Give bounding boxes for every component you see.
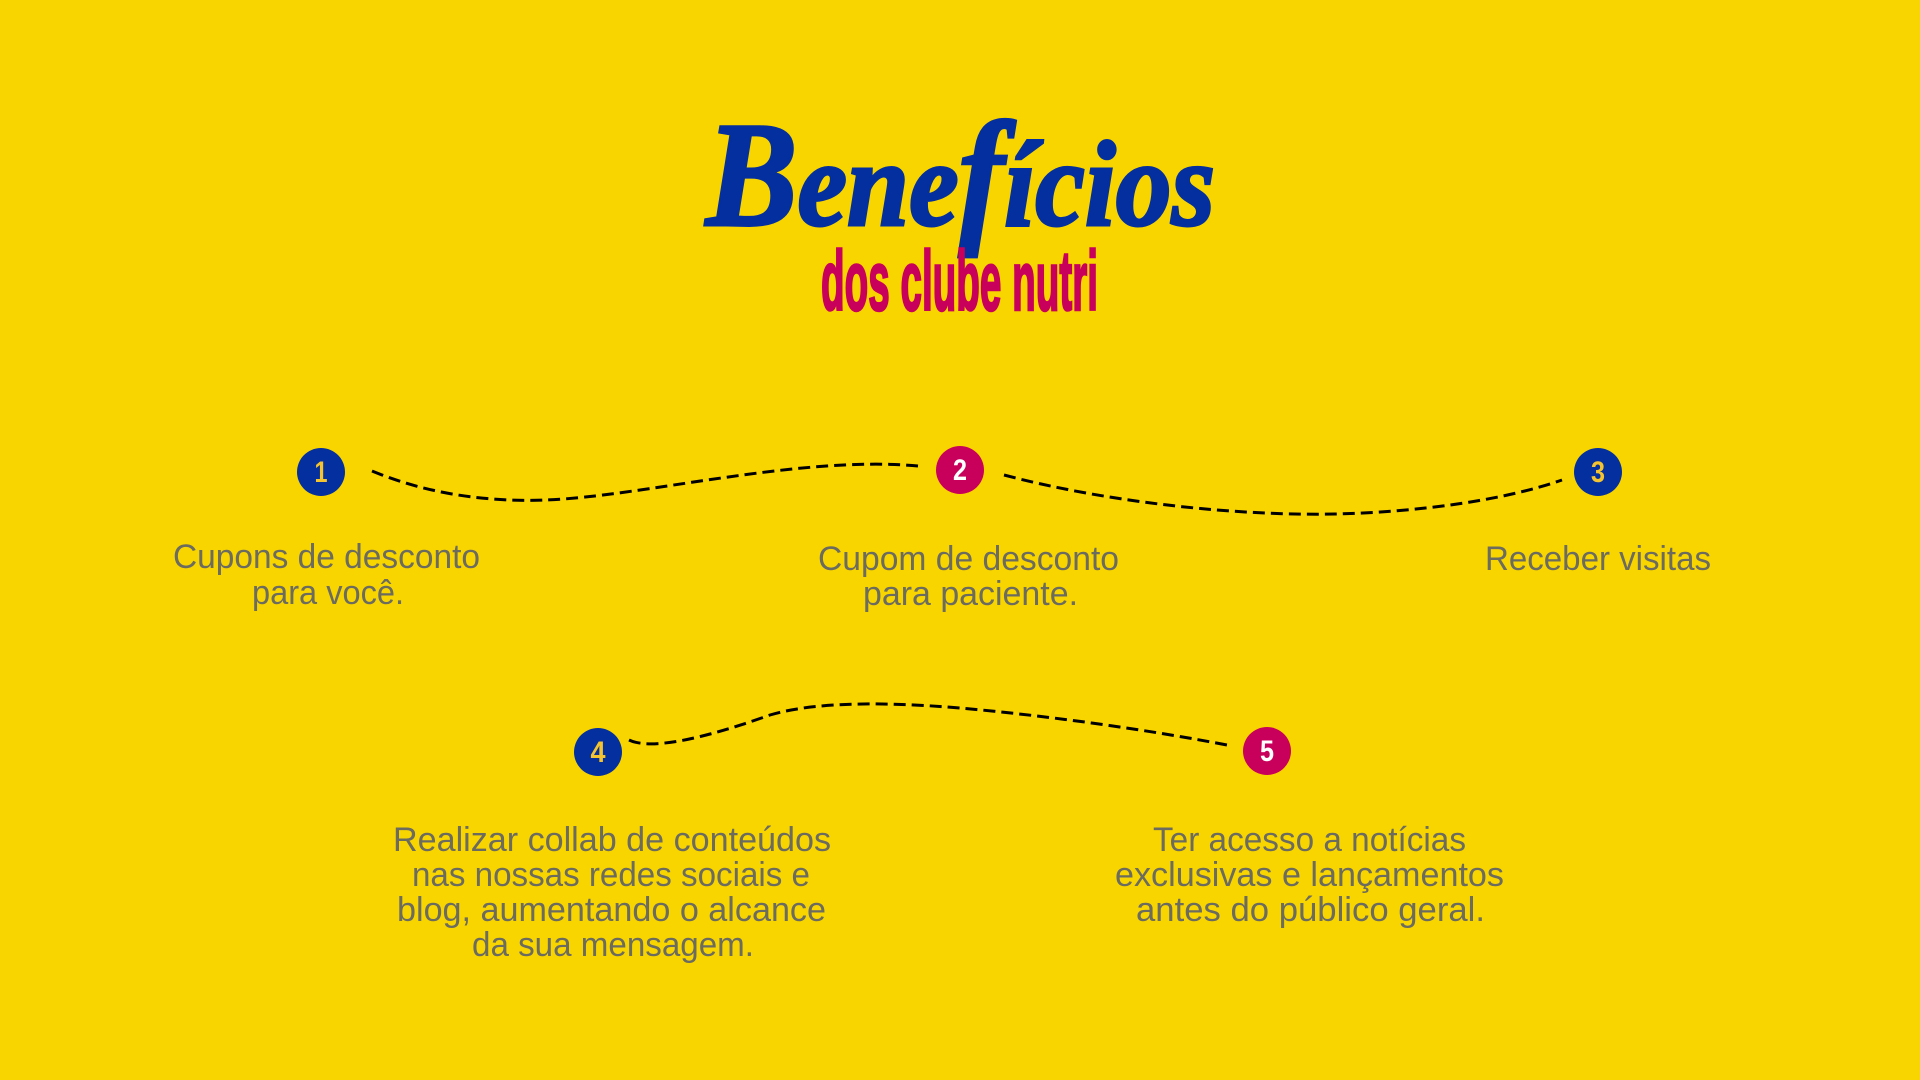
benefit 1 badge: 1 <box>314 456 328 489</box>
benefit 4 badge <box>574 728 622 776</box>
arrow: dashed curve from 1 to 2 <box>372 464 918 500</box>
benefit 3 badge: 3 <box>1591 456 1605 489</box>
arrow: dashed curve from 4 to 5 <box>629 704 1232 746</box>
benefit 4 text: Realizar collab de conteúdos <box>393 821 831 859</box>
benefit 3 text: Receber visitas <box>1485 540 1711 578</box>
benefit 5 text: exclusivas e lançamentos <box>1115 856 1504 894</box>
benefit 2 badge <box>936 446 984 494</box>
benefit 5 text: antes do público geral. <box>1136 891 1485 929</box>
benefit 5 text: Ter acesso a notícias <box>1153 821 1466 859</box>
benefit 1 badge <box>297 448 345 496</box>
benefit 4 text <box>393 821 831 964</box>
benefit 1 text: Cupons de desconto <box>173 538 480 576</box>
benefit 2 text <box>818 540 1119 613</box>
arrow: dashed curve from 2 to 3 <box>1004 475 1562 514</box>
benefit 5 badge <box>1243 727 1291 775</box>
benefit 5 badge: 5 <box>1260 735 1274 768</box>
benefit 2 text: para paciente. <box>863 575 1078 613</box>
title: Benefícios <box>704 92 1215 258</box>
benefit 2 badge: 2 <box>953 454 967 487</box>
text: dos clube nutri <box>821 234 1098 328</box>
benefit 4 text: blog, aumentando o alcance <box>397 891 826 929</box>
benefit 3 badge <box>1574 448 1622 496</box>
benefit 1 text: para você. <box>252 574 404 612</box>
benefit 4 text: nas nossas redes sociais e <box>412 856 810 894</box>
benefit 2 text: Cupom de desconto <box>818 540 1119 578</box>
benefit 5 text <box>1115 821 1504 929</box>
benefit 4 text: da sua mensagem. <box>472 926 754 964</box>
benefit 4 badge: 4 <box>590 736 606 769</box>
benefit 1 text <box>173 538 480 612</box>
